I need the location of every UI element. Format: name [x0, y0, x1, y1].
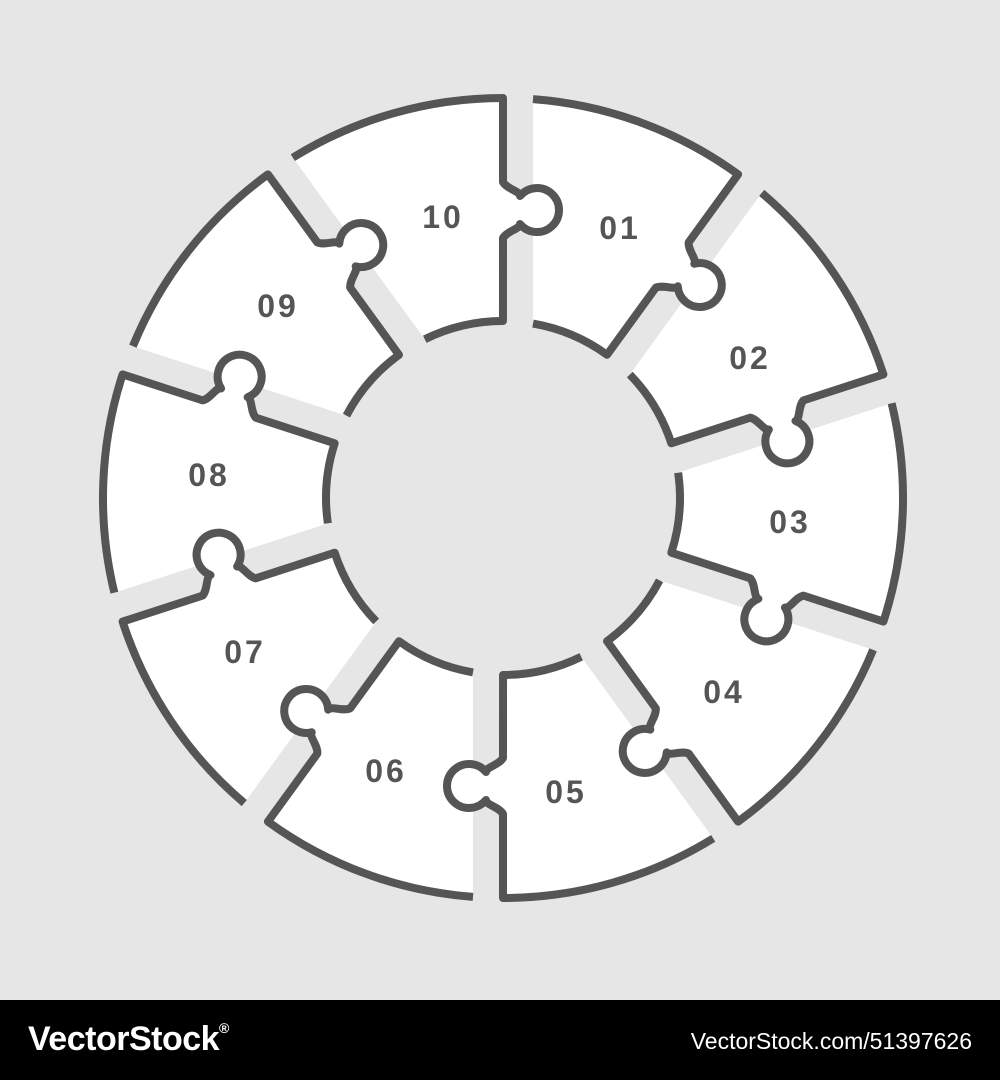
piece labels: 08 — [188, 457, 230, 493]
piece labels: 06 — [365, 753, 407, 789]
piece labels: 01 — [599, 210, 641, 246]
piece fills — [51, 37, 955, 959]
piece labels: 03 — [769, 504, 811, 540]
piece labels: 04 — [703, 674, 745, 710]
piece labels: 05 — [545, 774, 587, 810]
piece labels: 07 — [224, 634, 266, 670]
footer brand: VectorStock® — [28, 1020, 229, 1058]
piece labels: 02 — [729, 340, 771, 376]
piece outlines — [51, 37, 955, 959]
piece labels — [188, 199, 811, 810]
piece labels: 09 — [257, 288, 299, 324]
piece labels: 10 — [422, 199, 464, 235]
footer url: VectorStock.com/51397626 — [691, 1028, 972, 1054]
footer bar — [0, 1000, 1000, 1080]
